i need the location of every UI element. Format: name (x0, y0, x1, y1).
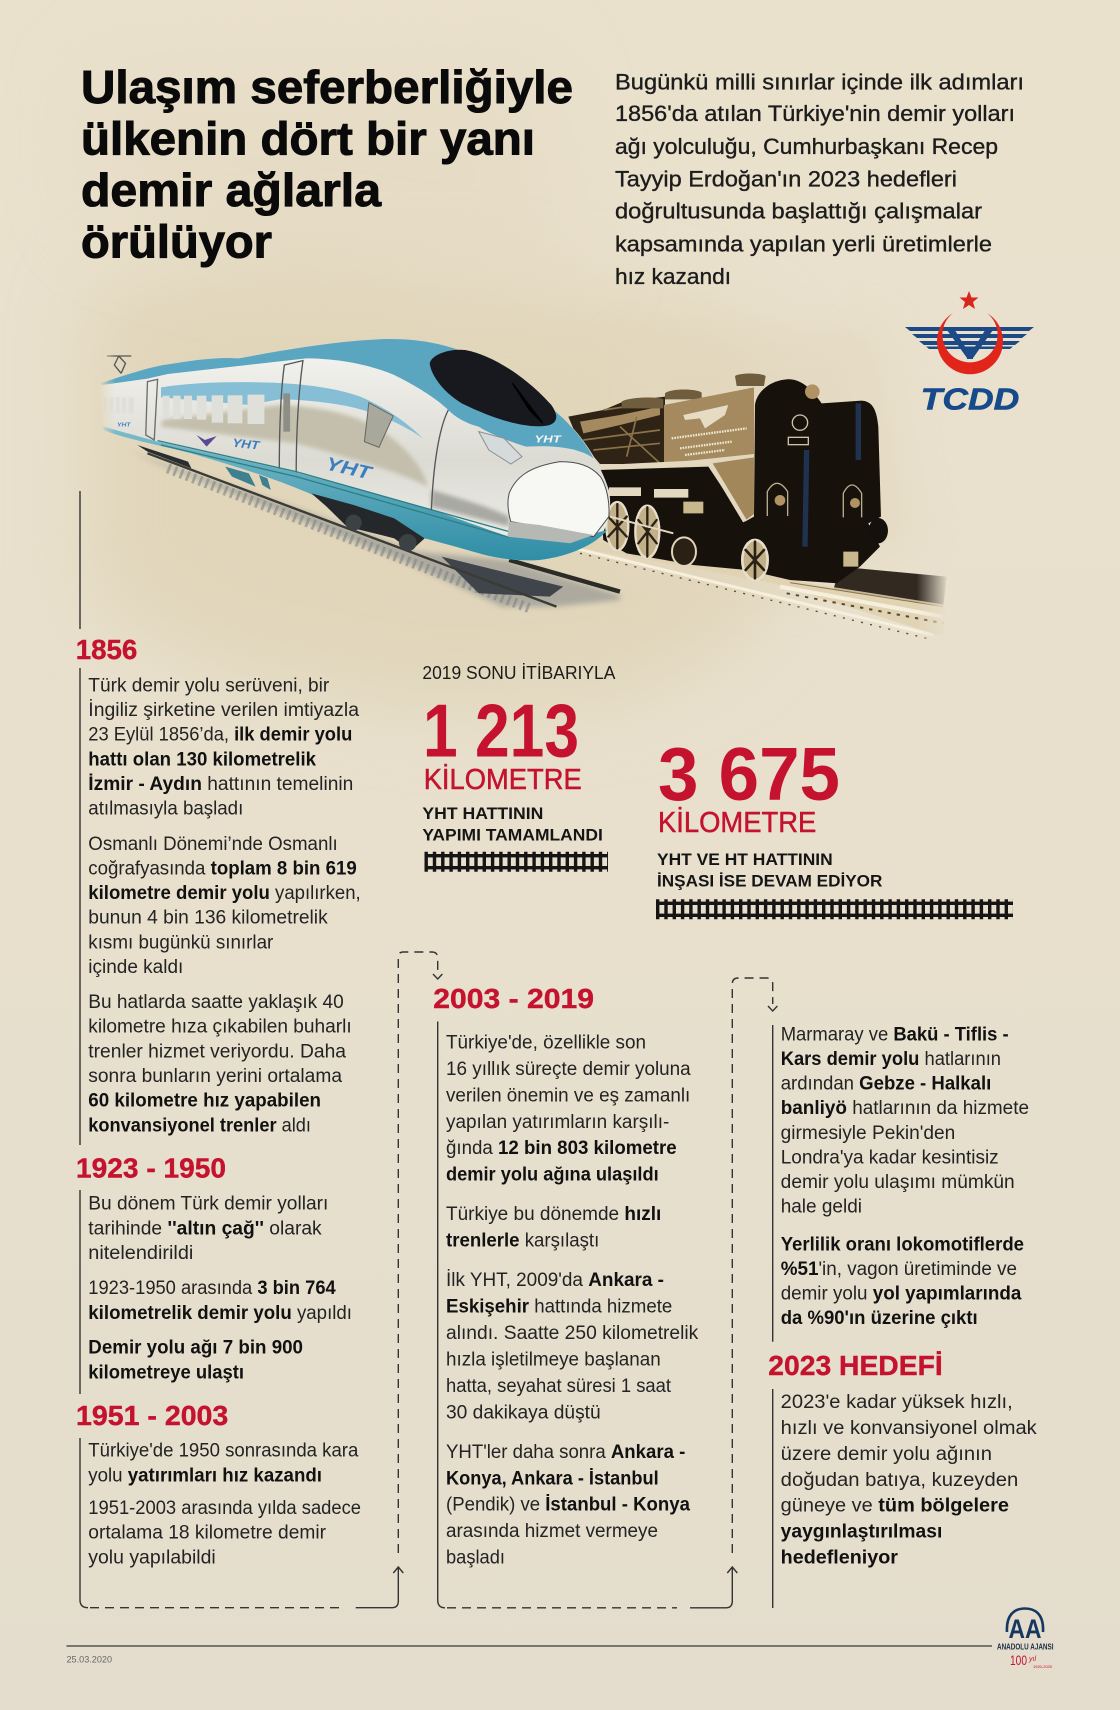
train body (100, 339, 610, 560)
rule and text: Marmaray: Londra'ya kadar kesintisiz (781, 1147, 999, 1168)
intro text: Bugünkü milli sınırlar içinde ilk adımları (615, 69, 1024, 94)
intro text: hız kazandı (615, 264, 731, 289)
icon: Anadolu Ajansı logo (997, 1608, 1054, 1669)
title: Ulaşım seferberliğiyle (81, 61, 573, 113)
carriage windows (104, 395, 264, 424)
train logos: YHT (232, 436, 262, 453)
title: ülkenin dört bir yanı (81, 113, 535, 165)
rule and text: Marmaray: Yerlilik oranı lokomotiflerde (781, 1234, 1024, 1255)
title: örülüyor (81, 216, 272, 268)
rule and text: 1923 - 1950 (80, 1190, 352, 1394)
rule and text: 2023 target: doğudan batıya, kuzeyden (781, 1470, 1018, 1491)
heading: 2003 - 2019: 2003 - 2019 (433, 983, 594, 1014)
icon: long rail track (656, 902, 1013, 917)
title: demir ağlarla (81, 164, 381, 216)
arrow: connector from 2003 - 2019 to last column (438, 978, 777, 1608)
text: 2003 - 2019: ğında 12 bin 803 kilometre (446, 1138, 677, 1159)
boiler (568, 397, 665, 464)
text: 2003 - 2019: İlk YHT, 2009'da Ankara - (446, 1270, 664, 1291)
rule and text: 2023 target: güneye ve tüm bölgelere (781, 1496, 1009, 1517)
pantograph (107, 356, 131, 373)
rule and text: 1856: kilometre hıza çıkabilen buharlı (88, 1017, 352, 1038)
rule and text: Marmaray (773, 1024, 1029, 1342)
high-speed train (100, 339, 620, 608)
text: 2003 - 2019: alındı. Saatte 250 kilometrelik (446, 1323, 699, 1344)
icon: TCDD logo (905, 291, 1034, 416)
rule and text: Marmaray: Marmaray ve Bakü - Tiflis - (781, 1024, 1009, 1045)
panel: 2019 statistics (422, 662, 1013, 917)
panel: 2003 - 2019 column (433, 983, 699, 1569)
text: 1951 - 2003: ortalama 18 kilometre demir (88, 1523, 327, 1544)
stat: 3 675 km: YHT VE HT HATTININ (657, 850, 833, 869)
rule and text: 1856: Bu hatlarda saatte yaklaşık 40 (88, 992, 344, 1013)
stat: 3 675 km (657, 732, 882, 891)
bogies (137, 445, 425, 551)
icon: Anadolu Ajansı logo: 100 (1010, 1652, 1027, 1668)
rule and text: 1856: Türk demir yolu serüveni, bir (88, 675, 330, 696)
text: 2003 - 2019: Türkiye'de, özellikle son (446, 1032, 646, 1053)
text: 1951 - 2003: 1951-2003 arasında yılda sadece (88, 1498, 361, 1519)
stat: 3 675 km: 3 675 (658, 732, 840, 816)
rule and text: Marmaray: hale geldi (781, 1197, 862, 1218)
text: 2003 - 2019: demir yolu ağına ulaşıldı (446, 1165, 659, 1186)
intro text: doğrultusunda başlattığı çalışmalar (615, 199, 982, 224)
rule and text: 2023 target: üzere demir yolu ağının (781, 1444, 992, 1465)
text: 2003 - 2019: YHT'ler daha sonra Ankara - (446, 1442, 685, 1463)
icon: short rail track (424, 854, 608, 869)
text: 2003 - 2019: Türkiye bu dönemde hızlı (446, 1204, 661, 1225)
steam locomotive (568, 373, 947, 638)
icon: TCDD logo: TCDD (921, 381, 1019, 416)
rule and text: 1856: 23 Eylül 1856’da, ilk demir yolu (88, 725, 352, 746)
stat: 1 213 km: 1 213 (423, 689, 579, 773)
rule and text: 1923 - 1950: kilometreye ulaştı (88, 1362, 244, 1383)
stat: 3 675 km: KİLOMETRE (658, 806, 816, 839)
text: 2003 - 2019: trenlerle karşılaştı (446, 1231, 599, 1252)
rule and text: 1856: trenler hizmet veriyordu. Daha (88, 1041, 346, 1062)
train logos: YHT (534, 434, 562, 445)
rule and text: 2023 target: hızlı ve konvansiyonel olmak (781, 1418, 1037, 1439)
rule and text: 2023 target: yaygınlaştırılması (781, 1522, 942, 1543)
rule and text: 1856: içinde kaldı (88, 957, 183, 978)
doors (279, 361, 303, 477)
icon: Anadolu Ajansı logo: 1920-2020 (1033, 1664, 1053, 1669)
rule and text: 1923 - 1950: 1923-1950 arasında 3 bin 764 (88, 1278, 336, 1299)
wheels (606, 502, 768, 580)
rule and text: Marmaray: ardından Gebze - Halkalı (781, 1074, 991, 1095)
title (81, 61, 573, 268)
text: 2003 - 2019: 16 yıllık süreçte demir yoluna (446, 1059, 691, 1080)
mid shading (161, 405, 428, 487)
heading: 1856: 1856 (76, 634, 137, 665)
train logos: YHT (324, 453, 375, 484)
intro text (615, 69, 1024, 289)
panel: 1856 timeline column (76, 491, 361, 1568)
rule and text: 1856: İngiliz şirketine verilen imtiyazla (88, 700, 359, 721)
text: 2003 - 2019: verilen önemin ve eş zamanlı (446, 1085, 690, 1106)
heading: 1951 - 2003: 1951 - 2003 (76, 1400, 228, 1431)
icon: Anadolu Ajansı logo: yıl (1028, 1656, 1036, 1663)
rule and text: Marmaray: da %90'ın üzerine çıktı (781, 1308, 978, 1329)
text: 2003 - 2019 (446, 1032, 699, 1569)
heading: 1923 - 1950: 1923 - 1950 (76, 1153, 226, 1184)
stat: 1 213 km (422, 689, 603, 845)
rule and text: 2023 target: hedefleniyor (781, 1548, 899, 1568)
text: 2003 - 2019: hatta, seyahat süresi 1 saat (446, 1376, 672, 1397)
rule and text: 1856: İzmir - Aydın hattının temelinin (88, 774, 353, 795)
side stripe (161, 382, 423, 438)
text: 1951 - 2003 (88, 1441, 361, 1568)
stat: 1 213 km: YAPIMI TAMAMLANDI (422, 826, 603, 845)
text: 2003 - 2019: Eskişehir hattında hizmete (446, 1297, 672, 1318)
intro text: Tayyip Erdoğan'ın 2023 hedefleri (615, 166, 957, 191)
intro text: ağı yolculuğu, Cumhurbaşkanı Recep (615, 134, 998, 159)
rule and text: Marmaray: banliyö hatlarının da hizmete (781, 1098, 1029, 1119)
footer line and date: 25.03.2020 (66, 1655, 112, 1666)
heading: 2023 HEDEFİ: 2023 HEDEFİ (768, 1350, 943, 1381)
rule and text: 2023 target (773, 1389, 1037, 1608)
rule and text: 1923 - 1950: tarihinde ''altın çağ'' olarak (88, 1218, 322, 1239)
text: 2003 - 2019: arasında hizmet vermeye (446, 1521, 658, 1542)
stat: 1 213 km: KİLOMETRE (424, 763, 582, 796)
rule and text: 1856: Osmanlı Dönemi’nde Osmanlı (88, 834, 338, 855)
rule and text: 1856: hattı olan 130 kilometrelik (88, 749, 316, 770)
text: 2003 - 2019: (Pendik) ve İstanbul - Konya (446, 1495, 690, 1516)
nose (508, 462, 609, 537)
train track and shadow (134, 453, 620, 608)
rule and text: Marmaray: demir yolu yol yapımlarında (781, 1284, 1022, 1305)
cab and smoke deflector (598, 379, 881, 583)
rule and text: 1856: kilometre demir yolu yapılırken, (88, 883, 361, 904)
panel: last column and 2023 target (768, 1024, 1037, 1608)
rule and text: 1923 - 1950: nitelendirildi (88, 1243, 193, 1264)
rule and text: 1923 - 1950: kilometrelik demir yolu yapıldı (88, 1303, 352, 1324)
stats caption: 2019 SONU İTİBARIYLA (422, 662, 616, 683)
text: 2003 - 2019: Konya, Ankara - İstanbul (446, 1468, 659, 1489)
text: 2003 - 2019: yapılan yatırımların karşılı- (446, 1112, 669, 1133)
rule and text: 1856: sonra bunların yerini ortalama (88, 1066, 342, 1087)
icon: Anadolu Ajansı logo: ANADOLU AJANSI (997, 1642, 1054, 1652)
rule and text: 1856: atılmasıyla başladı (88, 799, 243, 820)
text: 1951 - 2003: yolu yatırımları hız kazandı (88, 1466, 322, 1487)
rule and text: 1856: konvansiyonel trenler aldı (88, 1115, 311, 1136)
windscreen (430, 350, 556, 426)
text: 2003 - 2019: hızla işletilmeye başlanan (446, 1350, 661, 1370)
text: 1951 - 2003: Türkiye'de 1950 sonrasında kara (88, 1441, 359, 1462)
rule and text: 1923 - 1950: Bu dönem Türk demir yolları (88, 1193, 328, 1214)
text: 2003 - 2019: başladı (446, 1548, 505, 1569)
text: 1951 - 2003: yolu yapılabildi (88, 1547, 216, 1568)
locomotive track (573, 542, 947, 638)
rule and text: 2023 target: 2023'e kadar yüksek hızlı, (781, 1392, 1013, 1413)
rule and text: 1856: kısmı bugünkü sınırlar (88, 932, 274, 953)
rule and text: 1856: bunun 4 bin 136 kilometrelik (88, 908, 328, 929)
icon: Anadolu Ajansı logo: AA (1008, 1614, 1042, 1644)
train logos: YHT (117, 423, 132, 429)
stat: 3 675 km: İNŞASI İSE DEVAM EDİYOR (657, 872, 882, 891)
rule and text: 1856 (80, 668, 361, 1145)
rule and text: 1856: 60 kilometre hız yapabilen (88, 1091, 321, 1112)
intro text: kapsamında yapılan yerli üretimlerle (615, 232, 992, 256)
text: 2003 - 2019: 30 dakikaya düştü (446, 1402, 601, 1423)
rule and text: Marmaray: %51'in, vagon üretiminde ve (781, 1259, 1017, 1280)
vertical rule above 1856 (79, 491, 81, 629)
intro text: 1856'da atılan Türkiye'nin demir yolları (615, 101, 1015, 126)
rule and text: 1923 - 1950: Demir yolu ağı 7 bin 900 (88, 1338, 303, 1359)
rule and text: Marmaray: girmesiyle Pekin'den (781, 1123, 955, 1144)
stat: 1 213 km: YHT HATTININ (422, 804, 543, 823)
teal skirt (104, 427, 607, 560)
rule and text: Marmaray: Kars demir yolu hatlarının (781, 1049, 1001, 1070)
arrow: connector from first column to 2003 - 2019 (80, 952, 442, 1608)
train logos (117, 423, 562, 484)
rule and text: 1856: coğrafyasında toplam 8 bin 619 (88, 858, 357, 880)
headlight and emblem (805, 384, 820, 399)
roof (100, 339, 594, 458)
rule and text: Marmaray: demir yolu ulaşımı mümkün (781, 1172, 1015, 1193)
